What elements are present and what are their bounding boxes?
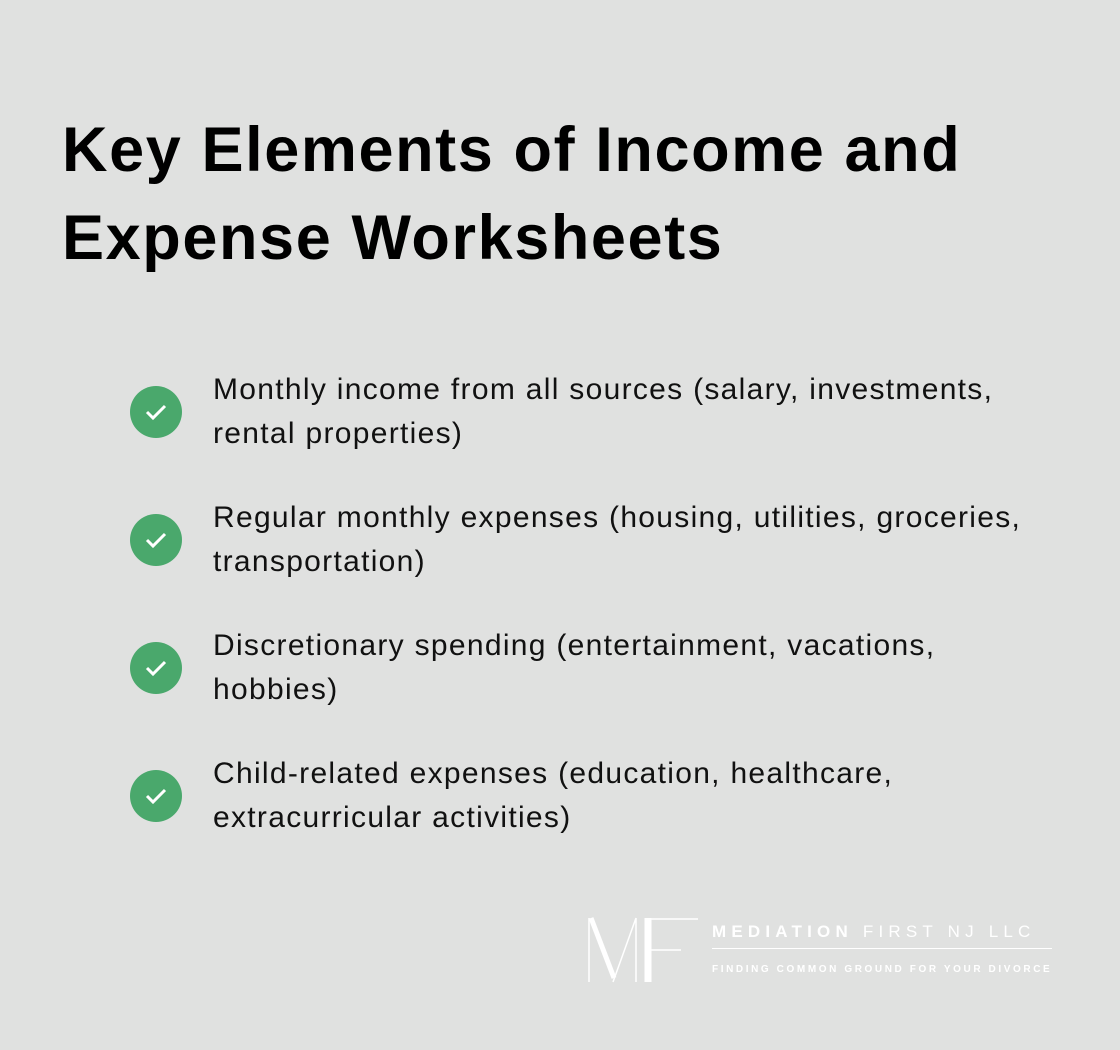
item: income: [130, 373, 993, 450]
text: Monthly income from all sources (salary, investments,: [213, 373, 993, 406]
icon: check: [130, 770, 182, 822]
text: [213, 757, 893, 834]
title: [62, 115, 961, 273]
icon: check: [130, 642, 182, 694]
text: Discretionary spending (entertainment, vacations,: [213, 629, 935, 662]
text: [213, 501, 1021, 578]
icon: check: [130, 514, 182, 566]
title: Key Elements of Income and: [62, 115, 961, 185]
text: Regular monthly expenses (housing, utilities, groceries,: [213, 501, 1021, 534]
text: Child-related expenses (education, healthcare,: [213, 757, 893, 790]
logo mark MF: [588, 917, 698, 982]
text: transportation): [213, 545, 426, 578]
company name: MEDIATION FIRST NJ LLC: [712, 922, 1036, 941]
text: [213, 629, 935, 706]
item: child: [130, 757, 893, 834]
item: discretionary: [130, 629, 935, 706]
text: extracurricular activities): [213, 801, 572, 834]
text: [213, 373, 993, 450]
tagline: FINDING COMMON GROUND FOR YOUR DIVORCE: [712, 964, 1052, 975]
text: hobbies): [213, 673, 338, 706]
title: Expense Worksheets: [62, 203, 723, 273]
logo: [588, 917, 1052, 982]
icon: check: [130, 386, 182, 438]
text: rental properties): [213, 417, 463, 450]
item: regular expenses: [130, 501, 1021, 578]
